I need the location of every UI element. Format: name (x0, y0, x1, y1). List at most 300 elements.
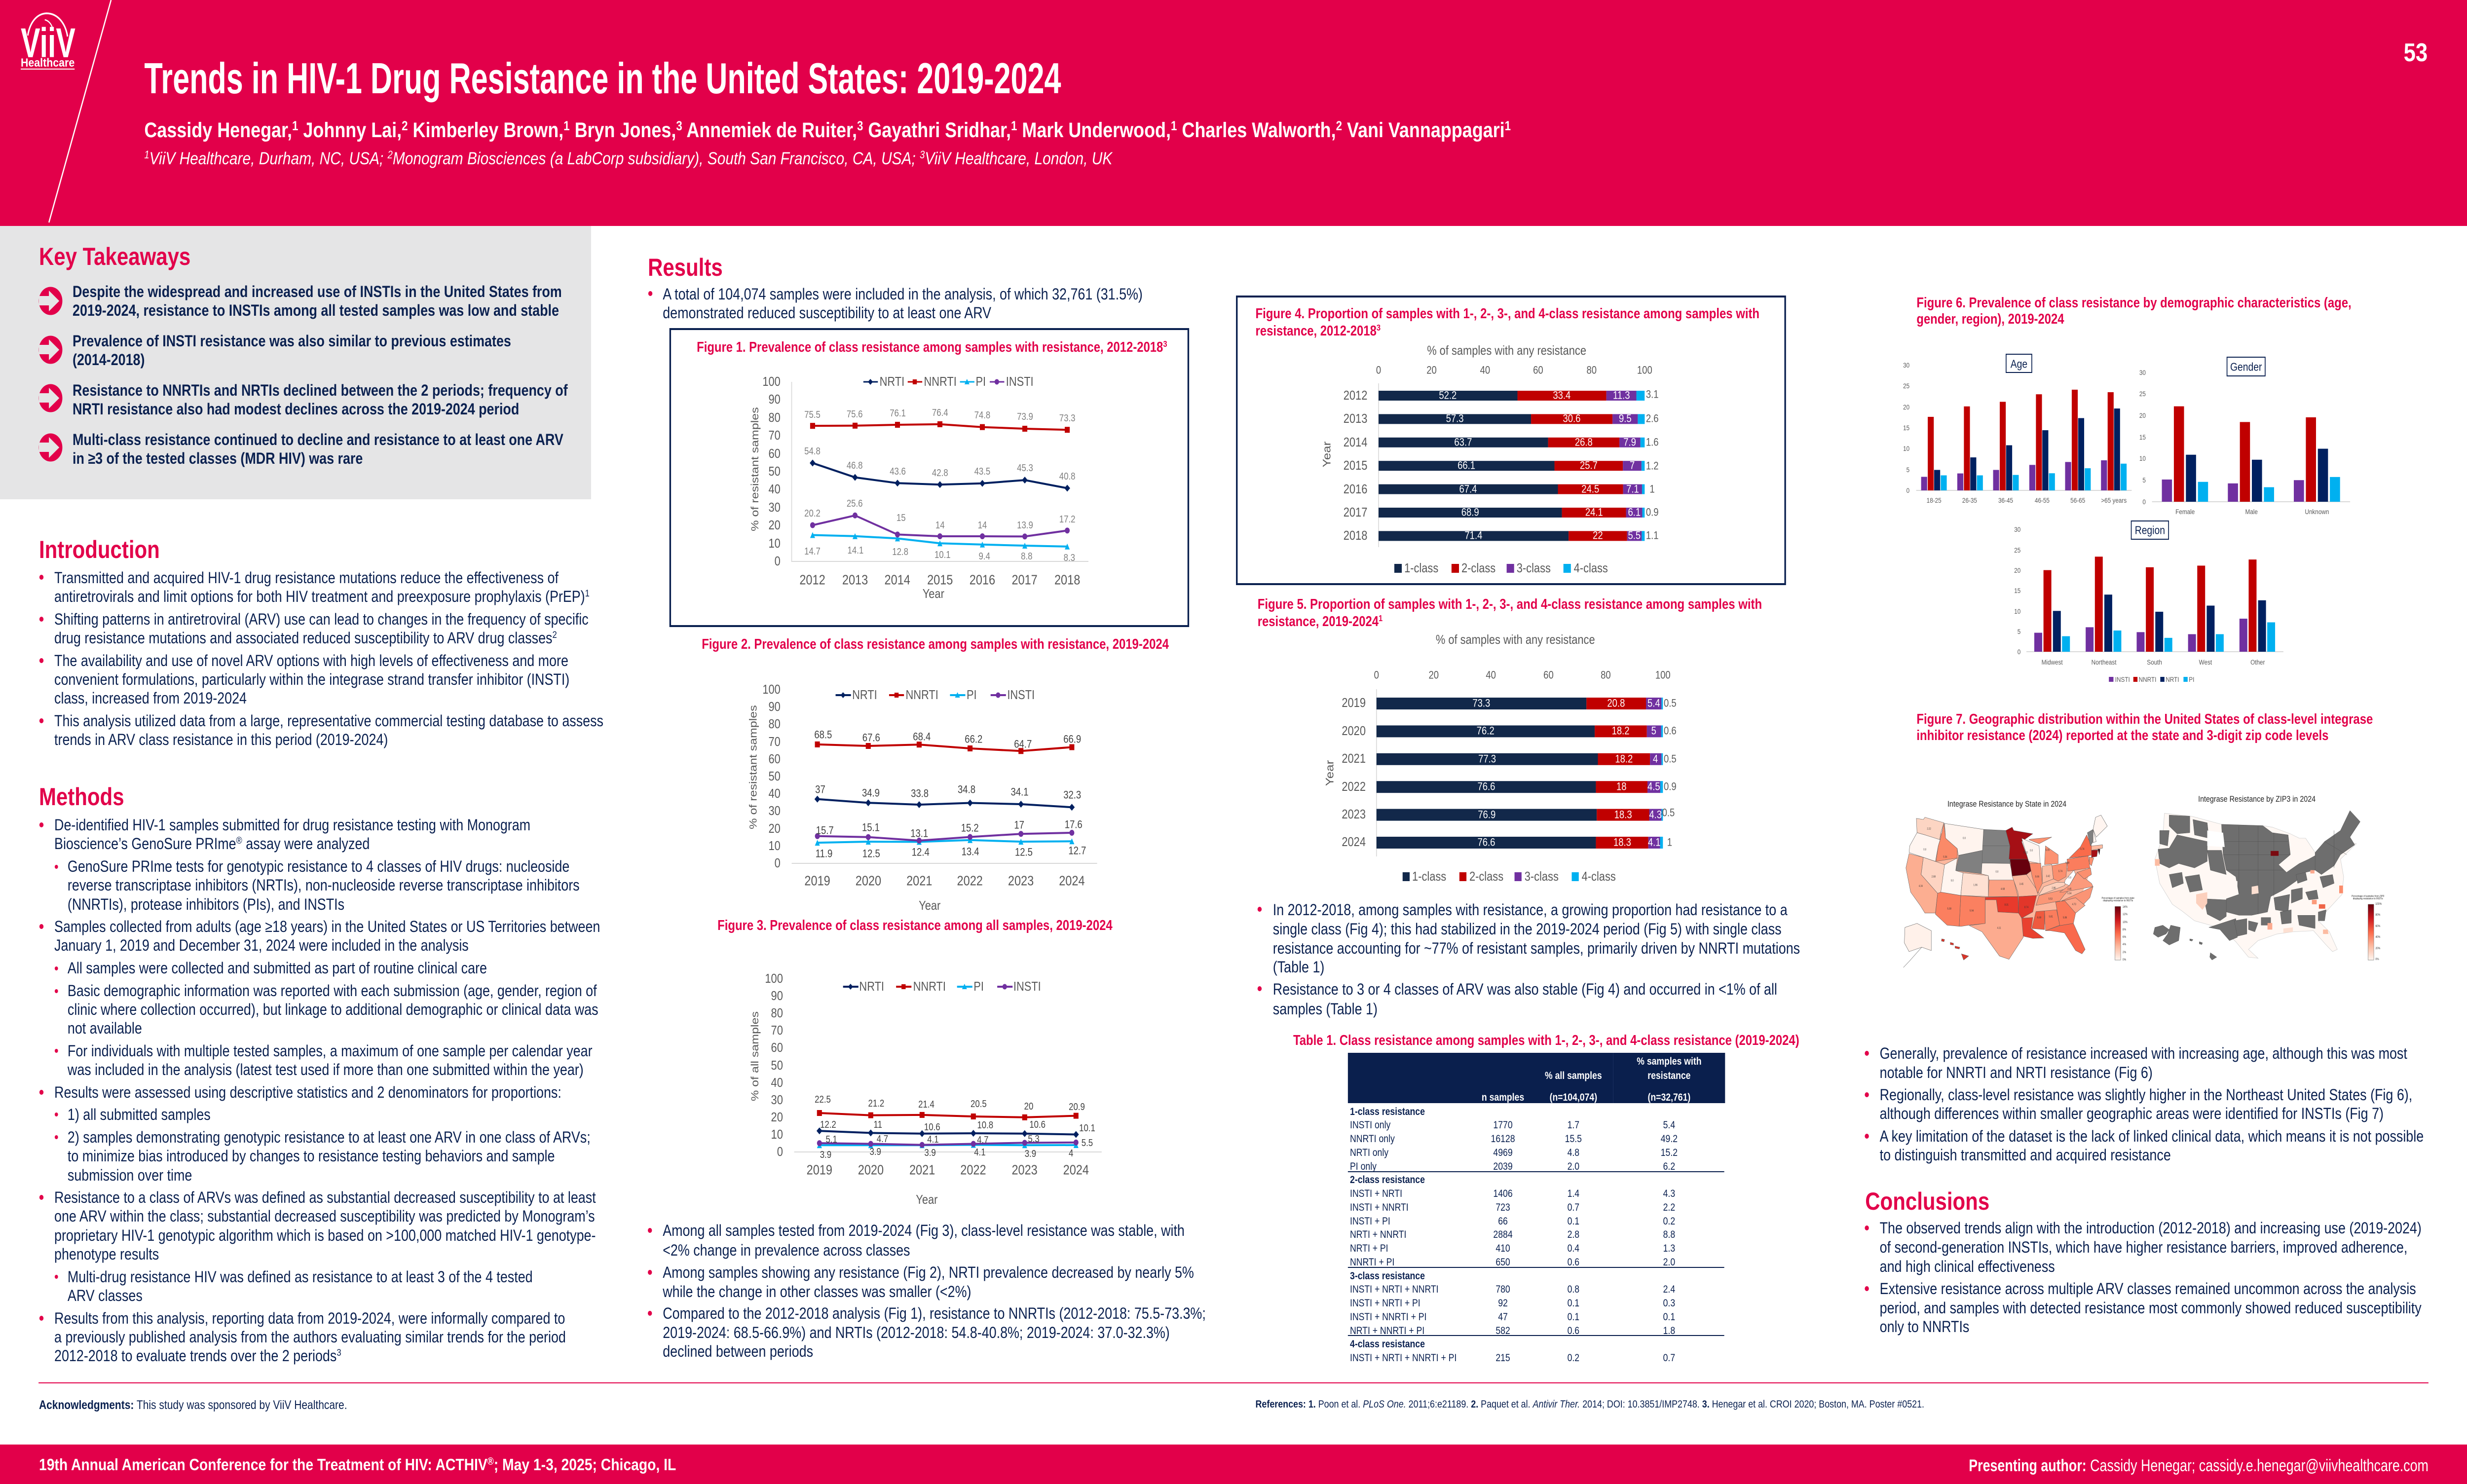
legend: figure 2 (836, 688, 1035, 703)
methods bullets: phenotype results (54, 1246, 159, 1263)
line chart: figure 3: 80 (771, 1006, 783, 1021)
table body: NNRTI only (1350, 1133, 1395, 1145)
legend: figure 3: NRTI (859, 979, 884, 994)
table body: 723 (1495, 1202, 1510, 1213)
takeaway 3: Resistance to NNRTIs and NRTIs declined between the 2 periods; frequency of (73, 382, 568, 400)
line chart: figure 1: 0 (775, 554, 781, 569)
state value labels: 5.53 (2049, 897, 2053, 900)
state value labels: 5.74 (2058, 870, 2062, 873)
colorbar: state map: 10% (2123, 921, 2128, 924)
stacked bar chart: figure 5: 4.1 (1648, 837, 1660, 849)
table body: INSTI + NRTI + NNRTI + PI (1350, 1352, 1457, 1364)
legend: figure 3 (843, 979, 1041, 994)
stacked bar chart: figure 5: 5.4 (1647, 698, 1660, 709)
legend: figure 6: INSTI (2115, 675, 2130, 683)
line chart: figure 1: 15 (897, 512, 906, 523)
introduction bullets: The availability and use of novel ARV options with high levels of effectiveness and more (54, 652, 568, 670)
results text below figure 3 (648, 1222, 1206, 1361)
line chart: figure 1: 40 (769, 482, 781, 497)
line chart: figure 1: 14 (935, 519, 945, 530)
stacked bar chart: figure 4: 2015 (1344, 458, 1367, 473)
colorbar: state map: 12% (2123, 913, 2128, 916)
line chart: figure 3: 4 (1069, 1148, 1073, 1158)
line chart: figure 2: 67.6 (862, 732, 880, 744)
line chart: figure 1: 73.3 (1059, 412, 1075, 423)
table body: 215 (1495, 1352, 1510, 1364)
bar chart: region: 0 (2018, 648, 2020, 656)
stacked bar chart: figure 4: 2012 (1344, 388, 1367, 403)
table body: 4.3 (1663, 1188, 1675, 1199)
bar chart: age: 56-65 (2070, 496, 2085, 504)
takeaway 4: in ≥3 of the tested classes (MDR HIV) was rare (73, 450, 363, 468)
legend: figure 1: NNRTI (924, 374, 957, 389)
line chart: figure 1: 50 (769, 464, 781, 479)
line chart: figure 2: 64.7 (1014, 739, 1032, 750)
table body: 2.4 (1663, 1284, 1675, 1295)
stacked bar chart: figure 4: 0 (1376, 365, 1381, 376)
bar chart: region (2014, 521, 2283, 683)
stacked bar chart: figure 4: 52.2 (1439, 390, 1457, 402)
colorbar: ZIP3 map: 40% (2375, 936, 2380, 939)
line chart: figure 2: 50 (769, 769, 781, 784)
table body: 0.7 (1568, 1202, 1579, 1213)
takeaway 4: Multi-class resistance continued to decline and resistance to at least one ARV (73, 431, 563, 449)
line chart: figure 3: 20.5 (971, 1098, 987, 1109)
stacked bar chart: figure 5: 0.5 (1664, 698, 1677, 709)
line chart: figure 3: 4.7 (977, 1134, 988, 1145)
figure 6 (1903, 295, 2352, 683)
stacked bar chart: figure 4: 100 (1637, 365, 1652, 376)
state value labels: 5.66 (2035, 875, 2039, 878)
label box: age: Age (2011, 358, 2027, 371)
line chart: figure 1: 42.8 (932, 467, 948, 478)
bar chart: region: South (2147, 658, 2162, 666)
line chart: figure 1: 10.1 (934, 549, 951, 560)
stacked bar chart: figure 4: 3.1 (1646, 389, 1659, 401)
references: References: 1. Poon et al. PLoS One. 2011;6:e21189. 2. Paquet et al. Antivir Ther. 2014; DOI: 10.3851/IMP2748. 3. Henegar et al. CROI 2020; Boston, MA. Poster #0521. (1256, 1399, 1924, 1410)
stacked bar chart: figure 5: 2023 (1342, 807, 1366, 822)
figure 7 title (1916, 711, 2373, 743)
results text: class resistance: (Table 1) (1273, 959, 1324, 976)
line chart: figure 3: 12.2 (820, 1119, 836, 1130)
line chart: figure 3: 5.1 (825, 1134, 837, 1145)
colorbar: state map: Percentage of samples from state (2102, 897, 2134, 900)
state value labels: 5.38 (1947, 907, 1951, 910)
stacked bar chart: figure 4: 60 (1533, 365, 1543, 376)
line chart: figure 2: 70 (769, 735, 781, 749)
stacked bar chart: figure 5: 2019 (1342, 696, 1366, 710)
line chart: figure 2: 2024 (1059, 874, 1085, 889)
legend: figure 4: 3-class (1517, 561, 1551, 576)
line chart: figure 1: 80 (769, 410, 781, 425)
results text: demographics: notable for NNRTI and NRTI resistance (Fig 6) (1880, 1064, 2153, 1082)
introduction bullets: trends in ARV class resistance in this period (2019-2024) (54, 731, 388, 749)
table body: 16128 (1491, 1133, 1515, 1145)
colorbar: ZIP3 map: displaying resistance to INSTIs (2353, 897, 2383, 900)
figure 7 title: inhibitor resistance (2024) reported at the state and 3-digit zip code levels (1916, 727, 2328, 743)
state value labels: 6.69 (2037, 916, 2042, 919)
figure 5 title: Figure 5. Proportion of samples with 1-, 2-, 3-, and 4-class resistance among samples with (1258, 596, 1762, 612)
takeaway 2: Prevalence of INSTI resistance was also similar to previous estimates (73, 333, 511, 350)
bar chart: age: 46-55 (2035, 496, 2050, 504)
table body: 2.8 (1568, 1229, 1579, 1240)
bar chart: gender (2139, 357, 2350, 516)
line chart: figure 3: 50 (771, 1058, 783, 1073)
stacked bar chart: figure 5: 18 (1616, 781, 1627, 793)
table 1 title: Table 1. Class resistance among samples with 1-, 2-, 3-, and 4-class resistance (2019-2024) (1293, 1032, 1799, 1048)
state value labels: 5.54 (1943, 855, 1947, 858)
stacked bar chart: figure 5: 2022 (1342, 779, 1366, 794)
line chart: figure 1: 60 (769, 446, 781, 461)
line chart: figure 3: 2023 (1011, 1163, 1038, 1178)
bar chart: gender: 10 (2139, 454, 2146, 462)
stacked bar chart: figure 5: 77.3 (1478, 753, 1496, 765)
table header: % all samples (1545, 1070, 1602, 1081)
methods bullets: For individuals with multiple tested samples, a maximum of one sample per calendar year (68, 1042, 593, 1060)
section: methods (39, 783, 600, 1365)
line chart: figure 3: 21.4 (918, 1099, 934, 1110)
line chart: figure 2: 90 (769, 700, 781, 714)
table body: 1.3 (1663, 1243, 1675, 1254)
legend: figure 1: PI (975, 374, 986, 389)
line chart: figure 3: 4.7 (877, 1133, 888, 1144)
methods bullets: Samples collected from adults (age ≥18 years) in the United States or US Territories between (54, 918, 600, 936)
results text: demographics: to distinguish transmitted and acquired resistance (1880, 1147, 2171, 1164)
line chart: figure 3: 21.2 (868, 1098, 884, 1109)
line chart: figure 2: 13.1 (910, 828, 928, 840)
figure 4 panel (1237, 297, 1785, 584)
bar chart: age: 5 (1906, 466, 1909, 474)
line chart: figure 3: 3.9 (870, 1146, 881, 1157)
stacked bar chart: figure 5: 20.8 (1607, 698, 1625, 709)
state value labels: 5.04 (2067, 892, 2072, 895)
introduction bullets: Shifting patterns in antiretroviral (ARV) use can lead to changes in the frequency of specific (54, 611, 589, 629)
state value labels: 5.81 (2049, 915, 2053, 918)
line chart: figure 3: 2024 (1063, 1163, 1089, 1178)
conclusions bullets: of second-generation INSTIs, which have higher resistance barriers, improved adherence, (1880, 1239, 2407, 1257)
table body (1348, 1106, 1724, 1364)
stacked bar chart: figure 4: 6.1 (1628, 507, 1641, 519)
state value labels: 2.86 (2052, 887, 2056, 890)
line chart: figure 2: 15.7 (816, 825, 834, 837)
title: Trends in HIV-1 Drug Resistance in the United States: 2019-2024 (144, 54, 1061, 103)
stacked bar chart: figure 5: 0.5 (1662, 807, 1675, 819)
stacked bar chart: figure 4: 1.1 (1646, 530, 1659, 542)
legend: figure 4 (1394, 561, 1608, 576)
line chart: figure 1 (749, 374, 1088, 601)
line chart: figure 1: 100 (762, 374, 781, 389)
stacked bar chart: figure 5: 76.9 (1478, 809, 1495, 821)
line chart: figure 2: 100 (762, 682, 781, 697)
line chart: figure 1: 2013 (842, 573, 868, 588)
header banner (0, 0, 2467, 226)
bar chart: region: 10 (2014, 607, 2020, 615)
table body: 4-class resistance (1350, 1338, 1425, 1350)
bar chart: age: 20 (1903, 403, 1909, 411)
methods bullets: Results from this analysis, reporting data from 2019-2024, were informally compared to (54, 1310, 565, 1328)
stacked bar chart: figure 4: 5.5 (1628, 530, 1641, 542)
line chart: figure 2: 20 (769, 821, 781, 836)
colorbar: state map: 6% (2123, 936, 2126, 939)
stacked bar chart: figure 5: 2020 (1342, 724, 1366, 739)
panel: key takeaways (0, 226, 591, 499)
line chart: figure 3: 10.1 (1079, 1122, 1095, 1133)
conference name: 19th Annual American Conference for the Treatment of HIV: ACTHIV®; May 1-3, 2025; Chicago, IL (39, 1455, 676, 1474)
figure 4 title (1256, 305, 1759, 338)
line chart: figure 3: 2019 (807, 1163, 832, 1178)
line chart: figure 2: % of resistant samples (748, 705, 759, 829)
takeaway 4 (39, 431, 563, 468)
stacked bar chart: figure 4: 0.9 (1646, 507, 1659, 519)
table header (1348, 1053, 1725, 1103)
takeaway 3: NRTI resistance also had modest declines across the 2019-2024 period (73, 401, 519, 418)
stacked bar chart: figure 4: 25.7 (1580, 460, 1598, 472)
line chart: figure 3: 4.1 (927, 1134, 939, 1145)
line chart: figure 2: 66.2 (965, 734, 982, 745)
line chart: figure 2: 60 (769, 752, 781, 767)
heading: methods: Methods (39, 783, 124, 811)
figure 1 title: Figure 1. Prevalence of class resistance among samples with resistance, 2012-20183 (697, 339, 1167, 355)
stacked bar chart: figure 5: 100 (1655, 669, 1671, 681)
figure 6 title: Figure 6. Prevalence of class resistance by demographic characteristics (age, (1916, 295, 2352, 310)
results text: class resistance (1258, 901, 1800, 1018)
table body: 0.6 (1568, 1257, 1579, 1268)
table body: 4969 (1493, 1147, 1513, 1158)
legend: figure 6 (2109, 675, 2194, 683)
label box: gender: Gender (2230, 361, 2262, 373)
stacked bar chart: figure 4: 68.9 (1461, 507, 1479, 519)
line chart: figure 3: 20.9 (1069, 1101, 1085, 1112)
stacked bar chart: figure 5: 73.3 (1472, 698, 1490, 709)
methods bullets: Bioscience’s GenoSure PRIme® assay were analyzed (54, 834, 370, 853)
methods bullets: De-identified HIV-1 samples submitted for drug resistance testing with Monogram (54, 816, 530, 834)
results text below figure 3: <2% change in prevalence across classes (663, 1242, 910, 1260)
line chart: figure 1: 2016 (970, 573, 995, 588)
stacked bar chart: figure 5: 18.3 (1614, 809, 1632, 821)
introduction bullets (39, 569, 603, 749)
state value labels: 4.73 (2072, 903, 2076, 906)
line chart: figure 1: 2014 (885, 573, 910, 588)
table body: NRTI only (1350, 1147, 1388, 1158)
table body: 15.2 (1661, 1147, 1678, 1158)
line chart: figure 3: 2021 (909, 1163, 935, 1178)
stacked bar chart: figure 5: 76.2 (1477, 725, 1495, 737)
results text: demographics: A key limitation of the dataset is the lack of linked clinical data, which means it is not possible (1880, 1128, 2424, 1146)
stacked bar chart: figure 5: 5 (1651, 725, 1656, 737)
bar chart: age: 36-45 (1998, 496, 2013, 504)
stacked bar chart: figure 5: 1 (1667, 837, 1672, 849)
results text below figure 3: while the change in other classes was smaller (<2%) (662, 1283, 971, 1301)
table body: INSTI + NNRTI + PI (1350, 1311, 1426, 1323)
methods bullets: reverse transcriptase inhibitors (NRTIs), non-nucleoside reverse transcriptase inhibitors (68, 877, 580, 894)
line chart: figure 3: 11 (874, 1119, 882, 1130)
legend: figure 5: 4-class (1582, 869, 1616, 884)
table header: % samples with (1637, 1056, 1702, 1067)
stacked bar chart: figure 4: 40 (1480, 365, 1490, 376)
stacked bar chart: figure 4: 2018 (1344, 528, 1367, 543)
results text below figure 3: declined between periods (663, 1343, 813, 1361)
introduction bullets: drug resistance mutations and associated reduced susceptibility to ARV drug classes2 (54, 629, 557, 647)
stacked bar chart: figure 4: 2016 (1344, 482, 1367, 497)
stacked bar chart: figure 4: 2013 (1344, 411, 1367, 426)
stacked bar chart: figure 5: % of samples with any resistance (1436, 632, 1595, 647)
colorbar: ZIP3 map: 60% (2375, 925, 2380, 928)
legend: figure 2: PI (967, 688, 977, 703)
legend: figure 5 (1403, 869, 1616, 884)
line chart: figure 1: 14 (978, 519, 987, 530)
line chart: figure 1: 10 (769, 536, 781, 551)
legend: figure 5: 3-class (1525, 869, 1559, 884)
table body: 0.1 (1568, 1298, 1579, 1309)
results text: class resistance: samples (Table 1) (1273, 1001, 1378, 1018)
table body: 2039 (1493, 1161, 1513, 1172)
table header: (n=32,761) (1648, 1092, 1690, 1103)
figure 6 title (1916, 295, 2352, 327)
line chart: figure 1: 12.8 (892, 546, 908, 557)
state value labels: 5.94 (1970, 909, 1974, 912)
state value labels: 0.0 (2030, 849, 2033, 852)
line chart: figure 1: 2015 (927, 573, 953, 588)
stacked bar chart: figure 5: Year (1324, 760, 1336, 786)
table header: resistance (1647, 1070, 1691, 1081)
line chart: figure 1: 9.4 (978, 551, 990, 561)
line chart: figure 1: 8.8 (1021, 551, 1032, 561)
results text below figure 3: 2019-2024: 68.5-66.9%) and NRTIs (2012-2018: 54.8-40.8%; 2019-2024: 37.0-32.3%) (663, 1324, 1170, 1342)
table body: 0.2 (1663, 1216, 1675, 1227)
heading: conclusions: Conclusions (1865, 1187, 1989, 1215)
introduction bullets: This analysis utilized data from a large, representative commercial testing database to assess (54, 712, 603, 730)
line chart: figure 2: 12.5 (1015, 847, 1033, 858)
map: integrase resistance by state: Integrase Resistance by State in 2024 (1947, 800, 2066, 809)
affiliations: 1ViiV Healthcare, Durham, NC, USA; 2Monogram Biosciences (a LabCorp subsidiary), South San Francisco, CA, USA; 3ViiV Healthcare, London, UK (144, 148, 1113, 168)
legend: figure 2: NNRTI (906, 688, 938, 703)
bar chart: age: >65 years (2101, 496, 2127, 504)
stacked bar chart: figure 5: 0.6 (1664, 725, 1677, 737)
bar chart: age: 15 (1903, 424, 1909, 432)
line chart: figure 3: 22.5 (815, 1094, 831, 1105)
section: introduction (39, 536, 603, 749)
line chart: figure 1: Year (923, 587, 944, 601)
legend: figure 1: NRTI (880, 374, 904, 389)
table body: INSTI + PI (1350, 1216, 1390, 1227)
legend: figure 6: NRTI (2166, 675, 2179, 683)
state value labels: 3.45 (2019, 883, 2023, 886)
line chart: figure 2: 17.6 (1065, 819, 1083, 831)
table body: 1.7 (1568, 1119, 1579, 1131)
results text below figure 3: Compared to the 2012-2018 analysis (Fig 1), resistance to NNRTIs (2012-2018: 75.5-73.3%; (663, 1305, 1206, 1323)
bar chart: region: Other (2250, 658, 2265, 666)
footer banner (0, 1445, 2467, 1484)
table body: 0.6 (1568, 1325, 1579, 1336)
bar chart: region: 15 (2014, 587, 2020, 594)
results text below figure 3: Among all samples tested from 2019-2024 (Fig 3), class-level resistance was stable, with (663, 1222, 1185, 1240)
methods bullets: All samples were collected and submitted as part of routine clinical care (68, 960, 487, 977)
legend: figure 1 (863, 374, 1034, 389)
line chart: figure 2: 30 (769, 804, 781, 818)
bar chart: region: 25 (2014, 546, 2020, 554)
colorbar: ZIP3 map: 20% (2375, 947, 2380, 950)
line chart: figure 1: 40.8 (1059, 471, 1075, 482)
line chart: figure 3: 3.9 (1025, 1148, 1036, 1159)
line chart: figure 1: 76.4 (932, 407, 948, 418)
stacked bar chart: figure 5: 0.5 (1664, 753, 1677, 765)
takeaway 1 (39, 283, 562, 320)
state value labels: 4.34 (1919, 885, 1923, 888)
table body: 1.4 (1568, 1188, 1579, 1199)
line chart: figure 3: 10 (771, 1127, 783, 1142)
stacked bar chart: figure 4: 11.3 (1613, 390, 1630, 402)
line chart: figure 1: 76.1 (890, 408, 906, 418)
line chart: figure 1: 14.1 (848, 545, 863, 556)
line chart: figure 1: 46.8 (847, 460, 863, 471)
label box: gender (2227, 357, 2265, 376)
line chart: figure 2: 12.4 (912, 847, 930, 858)
line chart: figure 1: 17.2 (1059, 514, 1075, 524)
line chart: figure 1: 8.3 (1064, 552, 1075, 563)
line chart: figure 3: Year (916, 1192, 937, 1207)
introduction bullets: convenient formulations, particularly within the integrase strand transfer inhibitor (INSTI) (54, 671, 569, 689)
table 1 (1293, 1032, 1799, 1364)
table header: (n=104,074) (1550, 1092, 1597, 1103)
line chart: figure 1: 74.8 (974, 409, 990, 420)
bar chart: gender: 0 (2142, 498, 2146, 506)
line chart: figure 3: 10.6 (1029, 1119, 1046, 1130)
table body: 0.2 (1568, 1352, 1579, 1364)
logo: ViiV Healthcare: ViiV (21, 20, 75, 66)
line chart: figure 3: 2020 (858, 1163, 884, 1178)
figure 3 (717, 917, 1113, 1207)
bar chart: age (1903, 354, 2131, 504)
methods bullets: was included in the analysis (latest test used if more than one submitted within the year) (67, 1061, 584, 1079)
state value labels (1919, 827, 2085, 929)
results text: demographics: Regionally, class-level resistance was slightly higher in the Northeast United States (Fig 6), (1880, 1086, 2412, 1104)
methods bullets: not available (68, 1020, 142, 1038)
line chart: figure 2: 40 (769, 786, 781, 801)
stacked bar chart: figure 5: 18.3 (1613, 837, 1631, 849)
stacked bar chart: figure 5: 0 (1374, 669, 1379, 681)
table body: 2884 (1493, 1229, 1513, 1240)
table body: 0.4 (1568, 1243, 1579, 1254)
state value labels: 2.88 (1932, 875, 1936, 878)
line chart: figure 1: 45.3 (1017, 462, 1033, 473)
table body: 1-class resistance (1350, 1106, 1425, 1117)
stacked bar chart: figure 4: 1.6 (1646, 437, 1659, 448)
legend: figure 2: NRTI (852, 688, 877, 703)
table body: 780 (1495, 1284, 1510, 1295)
line chart: figure 2: 34.9 (862, 787, 880, 799)
stacked bar chart: figure 4: 24.5 (1581, 483, 1599, 495)
colorbar: state map (2102, 897, 2134, 962)
table body: INSTI only (1350, 1119, 1391, 1131)
stacked bar chart: figure 4: 7.9 (1623, 437, 1636, 448)
bar chart: age: 26-35 (1962, 496, 1977, 504)
colorbar: state map: 8% (2123, 928, 2126, 931)
line chart: figure 2: 2019 (804, 874, 830, 889)
stacked bar chart: figure 5: 60 (1543, 669, 1554, 681)
table body: 47 (1498, 1311, 1508, 1323)
results intro bullet: A total of 104,074 samples were included in the analysis, of which 32,761 (31.5%) (663, 286, 1143, 303)
stacked bar chart: figure 4: 2017 (1344, 505, 1367, 520)
state value labels: 11.11 (2023, 851, 2028, 854)
label box: region (2131, 521, 2168, 539)
state value labels: 1.96 (1974, 884, 1978, 887)
state value labels: 2.22 (1927, 827, 1931, 830)
table body: 410 (1495, 1243, 1510, 1254)
stacked bar chart: figure 4: 33.4 (1553, 390, 1570, 402)
stacked bar chart: figure 5: 18.2 (1615, 753, 1633, 765)
table body: NRTI + NNRTI + PI (1350, 1325, 1424, 1336)
bar chart: gender: 15 (2139, 433, 2146, 441)
